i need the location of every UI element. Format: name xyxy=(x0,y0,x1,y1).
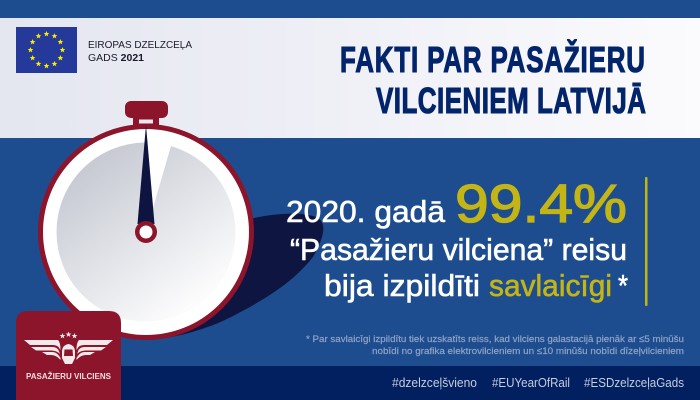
logo wings xyxy=(24,340,113,360)
stat value: 99.4% xyxy=(455,174,627,234)
stopwatch xyxy=(40,101,252,338)
stat headline: “Pasažieru vilciena” reisu xyxy=(290,232,627,267)
hashtags: #ESDzelzceļaGads xyxy=(584,375,684,390)
needle xyxy=(138,125,154,224)
elapsed wedge xyxy=(146,142,171,232)
footer bar xyxy=(0,366,700,400)
stopwatch face xyxy=(56,142,236,322)
title xyxy=(340,39,646,121)
logo train xyxy=(62,344,75,364)
stopwatch body xyxy=(40,126,252,338)
hashtags: #dzelzceļšvieno xyxy=(392,375,477,390)
logo stars xyxy=(60,332,77,338)
divider line xyxy=(645,177,648,306)
header band xyxy=(0,18,700,138)
title: VILCIENIEM LATVIJĀ xyxy=(376,81,646,121)
hashtags: #EUYearOfRail xyxy=(492,375,570,390)
title: FAKTI PAR PASAŽIERU xyxy=(340,39,645,80)
logo wordmark: PASAŽIERU VILCIENS xyxy=(26,372,112,381)
stat headline xyxy=(286,174,628,303)
European Year of Rail label xyxy=(88,39,192,64)
icon: EU flag xyxy=(16,27,77,73)
clock shadow xyxy=(120,214,323,339)
logo card xyxy=(16,311,121,400)
hashtags xyxy=(392,375,684,390)
highlighted word: savlaicīgi xyxy=(489,268,612,303)
stat headline: bija izpildīti xyxy=(324,268,480,303)
European Year of Rail label: EIROPAS DZELZCEĻA xyxy=(88,39,192,51)
footnote xyxy=(306,334,684,357)
European Year of Rail label: GADS 2021 xyxy=(88,52,144,64)
stat headline: * xyxy=(618,268,628,303)
footnote: nobīdi no grafika elektrovilcieniem un ≤10 minūšu nobīdi dīzeļvilcieniem xyxy=(372,346,684,357)
stopwatch crown xyxy=(125,101,168,130)
footnote: * Par savlaicīgi izpildītu tiek uzskatīts reiss, kad vilciens galastacijā pienāk ar ≤5 minūšu xyxy=(306,334,684,345)
stat headline: 2020. gadā xyxy=(286,194,446,229)
needle pin xyxy=(137,223,155,241)
